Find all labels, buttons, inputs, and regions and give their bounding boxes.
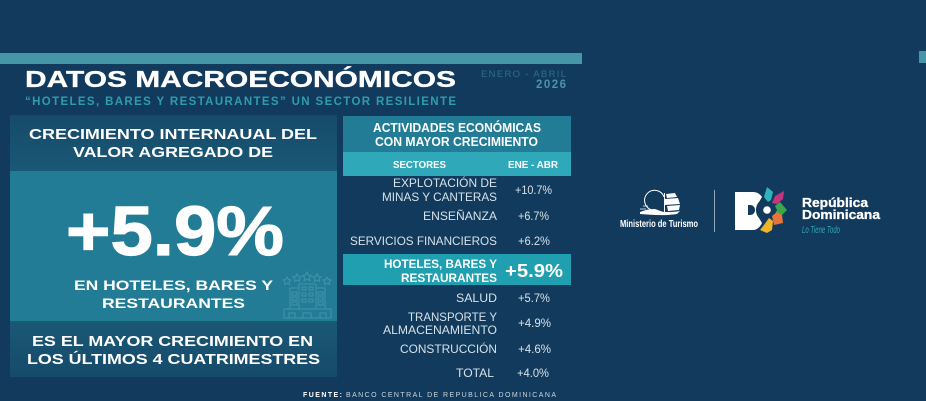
- conclusion text: LOS ÚLTIMOS 4 CUATRIMESTRES: [27, 350, 320, 368]
- row: servicios financieros: SERVICIOS FINANCIEROS: [350, 234, 497, 248]
- conclusion text: ES EL MAYOR CRECIMIENTO EN: [32, 333, 313, 350]
- date range: [481, 69, 566, 91]
- row: servicios financieros: +6.2%: [518, 236, 550, 248]
- panel: table of activities: [343, 116, 571, 380]
- row: explotacion: EXPLOTACIÓN DE: [393, 175, 497, 190]
- table heading: ACTIVIDADES ECONÓMICAS: [373, 120, 541, 135]
- source note: BANCO CENTRAL DE REPUBLICA DOMINICANA: [346, 392, 556, 399]
- row: construccion: CONSTRUCCIÓN: [400, 341, 497, 356]
- right band fragment: [919, 51, 926, 63]
- row: hoteles highlight: +5.9%: [505, 261, 563, 281]
- row: explotacion: +10.7%: [515, 185, 552, 197]
- panel: conclusion: [10, 321, 337, 377]
- top band: [0, 53, 582, 64]
- logo: Ministerio de Turismo: [620, 190, 698, 230]
- wordmark: Dominicana: [802, 207, 881, 222]
- row: transporte: TRANSPORTE Y: [408, 310, 497, 324]
- date range: ENERO - ABRIL: [481, 69, 566, 80]
- wordmark: [802, 195, 881, 222]
- table column headers: [343, 152, 571, 176]
- row: explotacion: [382, 175, 552, 204]
- row: ensenanza: ENSEÑANZA: [423, 209, 497, 223]
- row: hoteles highlight: [343, 254, 571, 285]
- tagline: Lo Tiene Todo: [802, 225, 840, 236]
- row: salud: SALUD: [456, 291, 497, 305]
- icon: sun and ship: [640, 190, 680, 215]
- row: ensenanza: [423, 209, 549, 223]
- key figure label: [74, 277, 274, 311]
- icon: DR mark: [735, 187, 787, 233]
- row: transporte: [383, 310, 551, 337]
- row: transporte: +4.9%: [518, 318, 551, 330]
- logo: República Dominicana: [735, 187, 881, 236]
- heading: growth: CRECIMIENTO INTERNAUAL DEL: [29, 126, 317, 143]
- source note: FUENTE:: [303, 392, 342, 399]
- key figure label: EN HOTELES, BARES Y: [74, 277, 274, 293]
- icon: hotel: [283, 272, 331, 318]
- row: salud: [456, 291, 550, 305]
- row: salud: +5.7%: [518, 293, 550, 305]
- big number: +5.9%: [66, 192, 284, 270]
- wordmark: República: [802, 195, 869, 210]
- row: construccion: [400, 341, 551, 356]
- row: total: [456, 366, 549, 380]
- table column headers: SECTORES: [393, 159, 446, 171]
- table column headers: ENE - ABR: [508, 159, 558, 171]
- row: total: +4.0%: [517, 368, 549, 380]
- table heading: [343, 116, 571, 152]
- row: hoteles highlight: RESTAURANTES: [401, 273, 497, 285]
- panel: growth headline: [10, 115, 337, 171]
- key figure label: RESTAURANTES: [102, 295, 245, 311]
- divider: [714, 190, 715, 232]
- row: explotacion: MINAS Y CANTERAS: [382, 190, 497, 204]
- subtitle: “HOTELES, BARES Y RESTAURANTES” UN SECTOR RESILIENTE: [25, 96, 456, 108]
- heading: growth: [29, 126, 317, 161]
- logo: Ministerio de Turismo: Ministerio de Turismo: [620, 219, 698, 230]
- title: DATOS MACROECONÓMICOS: [25, 65, 456, 92]
- row: hoteles highlight: HOTELES, BARES Y: [384, 259, 497, 271]
- row: ensenanza: +6.7%: [518, 211, 549, 223]
- row: total: TOTAL: [456, 366, 494, 380]
- table heading: CON MAYOR CRECIMIENTO: [375, 135, 538, 149]
- row: construccion: +4.6%: [518, 344, 551, 356]
- heading: growth: VALOR AGREGADO DE: [73, 144, 273, 161]
- panel: key figure: [10, 171, 337, 321]
- conclusion text: [27, 333, 320, 368]
- row: transporte: ALMACENAMIENTO: [383, 323, 497, 337]
- date range: 2026: [536, 79, 566, 91]
